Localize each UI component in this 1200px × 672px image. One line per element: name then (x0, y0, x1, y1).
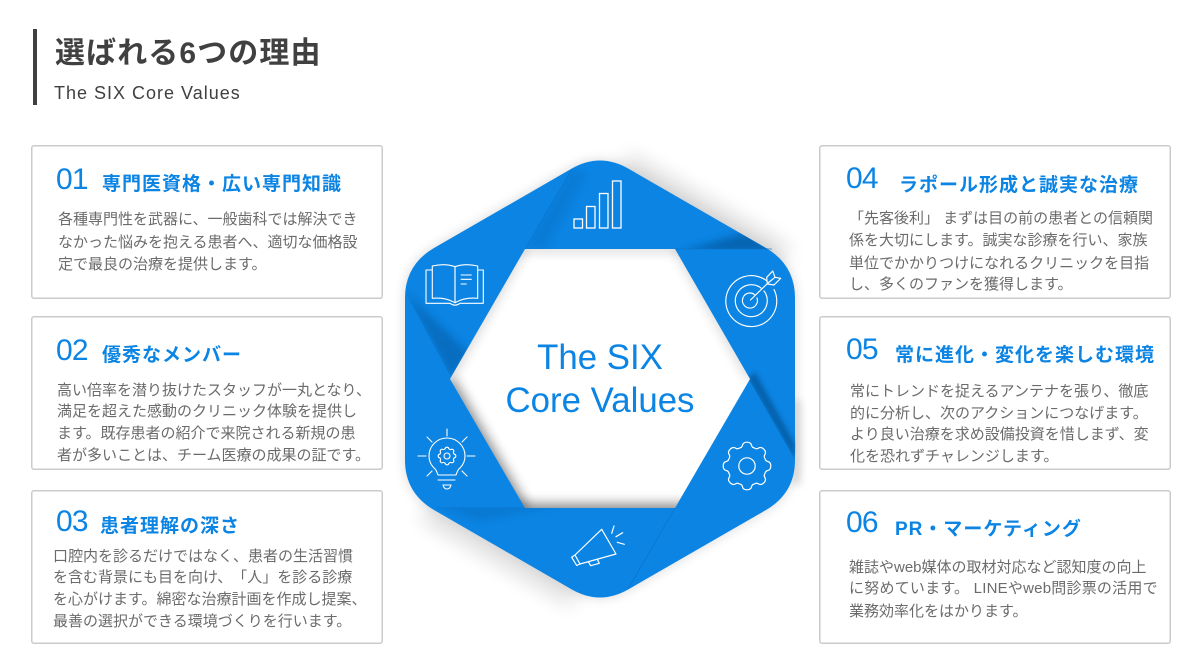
panel: 05 (819, 316, 1171, 470)
text 02 (57, 382, 371, 464)
hexagon ribbon (405, 160, 795, 598)
title accent bar (33, 29, 37, 105)
icon: gear (723, 442, 771, 490)
panel: 02 (31, 316, 383, 470)
heading 06: PR・マーケティング (895, 519, 1082, 540)
text 03: を心がけます。綿密な治療計画を作成し提案、 (53, 591, 367, 608)
icon: target (726, 271, 781, 327)
text 03: 最善の選択ができる環境づくりを行います。 (53, 613, 351, 630)
text 06: 雑誌やweb媒体の取材対応など認知度の向上 (849, 559, 1147, 576)
panel: 06 (819, 490, 1171, 644)
number 02: 02 (56, 334, 88, 367)
icon: open book (426, 265, 483, 305)
text 03 (53, 548, 367, 630)
text 04 (849, 210, 1153, 293)
icon: megaphone (572, 526, 624, 566)
text 05: 化を恐れずチャレンジします。 (850, 448, 1058, 465)
text 05: 常にトレンドを捉えるアンテナを張り、徹底 (850, 383, 1148, 400)
text 03: 口腔内を診るだけではなく、患者の生活習慣 (53, 548, 353, 565)
text 01 (58, 211, 358, 273)
panel: 03 (31, 490, 383, 644)
inner hexagon (446, 247, 753, 512)
text 02: 満足を超えた感動のクリニック体験を提供し (57, 403, 357, 420)
heading 03: 患者理解の深さ (100, 516, 240, 537)
title block (33, 29, 322, 105)
heading 01: 専門医資格・広い専門知識 (102, 174, 342, 195)
hexagon diagram (405, 160, 797, 598)
text 05: 的に分析し、次のアクションにつなげます。 (850, 405, 1148, 422)
icon: lightbulb with gear (418, 429, 475, 489)
text 02: ます。既存患者の紹介で来院される新規の患 (57, 425, 356, 442)
number 01: 01 (56, 163, 88, 196)
ribbon fold shading (405, 168, 795, 589)
center label line 2: Core Values (506, 381, 694, 420)
text 03: を含む背景にも目を向け、「人」を診る診療 (53, 569, 352, 586)
text 01: なかった悩みを抱える患者へ、適切な価格設 (58, 234, 358, 251)
number 03: 03 (56, 505, 88, 538)
text 04: 単位でかかりつけになれるクリニックを目指 (849, 255, 1149, 272)
panel: 04 (819, 145, 1171, 299)
text 05 (850, 383, 1149, 465)
center label: The SIX (537, 338, 663, 377)
hexagon outer shadow (405, 160, 797, 598)
text 01: 各種専門性を武器に、一般歯科では解決でき (58, 211, 358, 228)
text 01: 定で最良の治療を提供します。 (58, 256, 267, 273)
heading 02: 優秀なメンバー (102, 345, 242, 366)
text 04: 係を大切にします。誠実な診療を行い、家族 (849, 232, 1148, 249)
text 02: 高い倍率を潜り抜けたスタッフが一丸となり、 (57, 382, 371, 399)
text 02: 者が多いことは、チーム医療の成果の証です。 (57, 447, 370, 464)
title: 選ばれる6つの理由 (55, 37, 322, 70)
text 06: に努めています。 LINEやweb問診票の活用で (849, 580, 1158, 597)
number 06: 06 (846, 506, 878, 539)
icon: bar chart (574, 181, 621, 228)
number 05: 05 (846, 333, 878, 366)
heading 05: 常に進化・変化を楽しむ環境 (895, 345, 1155, 366)
text 04: 「先客後利」 まずは目の前の患者との信頼関 (849, 210, 1153, 227)
text 06 (849, 559, 1158, 620)
text 04: し、多くのファンを獲得します。 (849, 276, 1073, 293)
text 06: 業務効率化をはかります。 (849, 603, 1028, 620)
heading 04: ラポール形成と誠実な治療 (899, 175, 1139, 196)
subtitle: The SIX Core Values (54, 83, 241, 103)
text 05: より良い治療を求め設備投資を惜しまず、変 (850, 426, 1149, 443)
panel: 01 (31, 145, 383, 299)
number 04: 04 (846, 162, 878, 195)
